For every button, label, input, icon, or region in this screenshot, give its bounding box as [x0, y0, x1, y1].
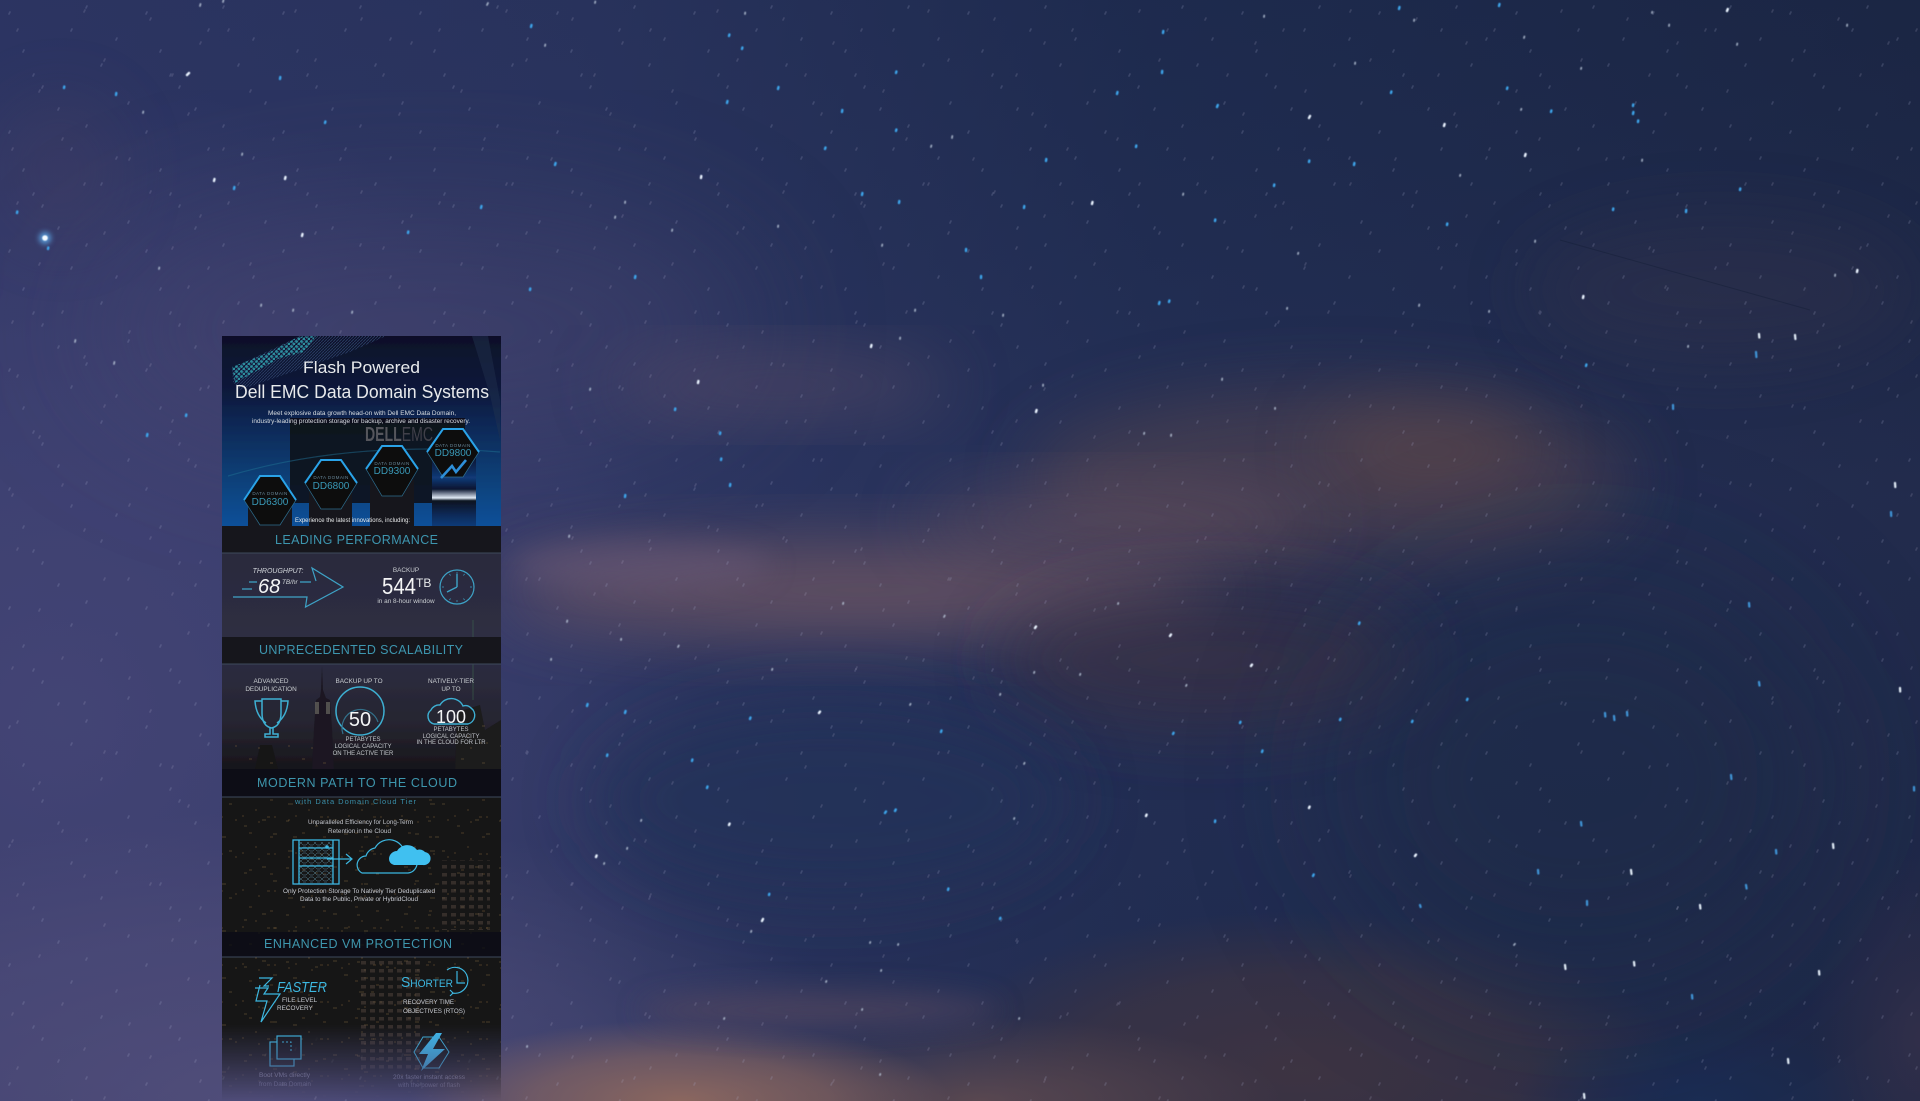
heading: modern path to the cloud: MODERN PATH TO THE CLOUD: [257, 776, 457, 790]
stat: advanced deduplication: ADVANCED: [253, 678, 289, 685]
heading: enhanced VM protection: [222, 932, 501, 957]
panel: hero header: [222, 336, 501, 526]
product: DD6800: DATA DOMAIN: [313, 475, 349, 480]
icon: trophy: [255, 699, 288, 737]
text: efficiency: Retention in the Cloud: [328, 828, 391, 835]
icon: cloud: [428, 699, 475, 724]
stat: backup 544 TB: in an 8-hour window: [377, 598, 435, 605]
logo: Dell EMC watermark: DELLEMC: [365, 424, 433, 446]
stat: backup up to 50 petabytes: ON THE ACTIVE TIER: [333, 751, 394, 757]
stat: shorter recovery time objectives: RECOVERY TIME: [403, 999, 454, 1006]
stat: boot VMs directly: [259, 1036, 311, 1088]
panel: enhanced VM protection: [222, 932, 501, 1089]
text: only protection storage: Only Protection Storage To Natively Tier Deduplicated: [283, 888, 435, 895]
bright star: [39, 232, 51, 244]
heading: leading performance: LEADING PERFORMANCE: [275, 533, 438, 547]
stat: shorter recovery time objectives: OBJECTIVES (RTOS): [403, 1008, 465, 1015]
panel: Data Domain infographic: [222, 336, 501, 1101]
caption: latest innovations: Experience the latest innovations, including:: [295, 517, 410, 524]
stat: backup up to 50 petabytes: LOGICAL CAPACITY: [334, 744, 392, 750]
stat: throughput 68 TB/hr with arrow: 68: [258, 576, 280, 598]
product: DD9800: DATA DOMAIN: [435, 443, 471, 448]
panel: leading performance: [222, 526, 501, 637]
stat: natively tier up to 100 petabytes: 100: [436, 707, 466, 727]
icon: clock: [440, 570, 474, 604]
panel: modern path to the cloud: [222, 769, 501, 1101]
stat: natively tier up to 100 petabytes: LOGICAL CAPACITY: [422, 734, 480, 740]
icon: cloud outline: [357, 840, 417, 873]
stat: 20x faster instant access: with the power of flash: [397, 1082, 460, 1089]
product: DD6300: [244, 476, 296, 526]
text: efficiency: Unparalleled Efficiency for Long-Term: [308, 819, 413, 826]
product: DD9300: DATA DOMAIN: [374, 461, 410, 466]
heading: leading performance: [222, 526, 501, 553]
stat: natively tier up to 100 petabytes: PETABYTES: [434, 727, 468, 733]
heading: enhanced VM protection: ENHANCED VM PROTECTION: [264, 937, 452, 951]
stat: natively tier up to 100 petabytes: [416, 678, 486, 746]
icon: server rack: [293, 840, 339, 884]
stat: natively tier up to 100 petabytes: IN THE CLOUD FOR LTR: [416, 740, 486, 746]
product: DD9800: DD9800: [435, 448, 472, 459]
stat: backup up to 50 petabytes: BACKUP UP TO: [335, 678, 383, 685]
stat: 20x faster instant access: 20x faster instant access: [393, 1074, 465, 1081]
heading: modern path to the cloud: [222, 769, 501, 797]
stat: advanced deduplication: DEDUPLICATION: [245, 686, 297, 693]
product: DD6800: DD6800: [313, 481, 350, 492]
stat: backup up to 50 petabytes: PETABYTES: [346, 737, 380, 743]
panel: unprecedented scalability: [222, 620, 501, 769]
stat: boot VMs directly: from Data Domain: [259, 1081, 311, 1088]
stat: faster file level recovery: [255, 978, 327, 1022]
stat: boot VMs directly: Boot VMs directly: [259, 1072, 311, 1079]
heading: unprecedented scalability: UNPRECEDENTED SCALABILITY: [259, 643, 464, 657]
stat: backup up to 50 petabytes: 50: [349, 709, 371, 731]
stat: natively tier up to 100 petabytes: UP TO: [441, 686, 461, 693]
title: Flash Powered: [303, 358, 420, 377]
stat: advanced deduplication: [245, 678, 297, 737]
title: [235, 358, 489, 402]
text: only protection storage: [283, 888, 435, 903]
stat: natively tier up to 100 petabytes: NATIVELY-TIER: [428, 678, 474, 685]
stat: 20x faster instant access: [393, 1033, 465, 1089]
stat: backup 544 TB: 544: [382, 573, 416, 599]
stat: faster file level recovery: RECOVERY: [277, 1005, 313, 1012]
subtitle: [252, 410, 470, 425]
stat: faster file level recovery: FASTER: [277, 979, 327, 996]
stat: backup 544 TB: TB: [416, 576, 431, 590]
stat: throughput 68 TB/hr with arrow: [233, 568, 343, 607]
stat: backup up to 50 petabytes: [333, 678, 394, 757]
title: Dell EMC Data Domain Systems: [235, 381, 489, 402]
stat: throughput 68 TB/hr with arrow: THROUGHPUT:: [253, 568, 303, 575]
icon: solid cloud: [389, 845, 431, 865]
product: DD6300: DD6300: [252, 497, 289, 508]
text: only protection storage: Data to the Public, Private or HybridCloud: [300, 896, 418, 903]
stat: throughput 68 TB/hr with arrow: TB/hr: [282, 579, 298, 586]
product: DD6300: DATA DOMAIN: [252, 491, 288, 496]
subtitle: Meet explosive data growth head-on with Dell EMC Data Domain,: [268, 410, 456, 417]
product: DD9800: [427, 429, 479, 526]
heading: unprecedented scalability: [222, 637, 501, 664]
stat: backup 544 TB: BACKUP: [393, 567, 419, 574]
product: DD9300: [366, 446, 418, 526]
illustration: city skyline: [222, 620, 501, 769]
subheading: cloud tier: with Data Domain Cloud Tier: [294, 797, 416, 806]
product: DD9300: DD9300: [374, 466, 411, 477]
stat: backup 544 TB: [377, 567, 435, 605]
stat: shorter recovery time objectives: SHORTER: [401, 974, 453, 991]
product: DD6800: [305, 460, 357, 526]
arrow: server to cloud: [327, 854, 352, 864]
text: efficiency: [308, 819, 413, 835]
subtitle: industry-leading protection storage for backup, archive and disaster recovery.: [252, 418, 470, 425]
stat: shorter recovery time objectives: [401, 967, 468, 1015]
stat: faster file level recovery: FILE LEVEL: [282, 997, 318, 1004]
